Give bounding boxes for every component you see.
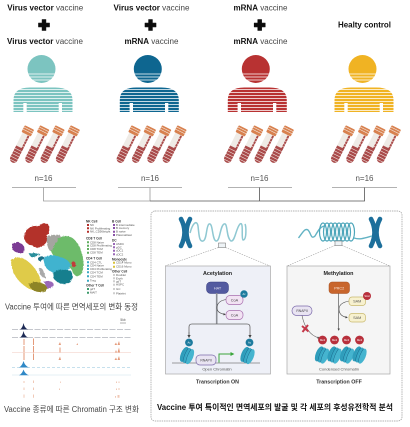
legend: cell types: CD8 Naive <box>90 240 104 244</box>
icon: person group 3 <box>226 55 288 112</box>
legend: cell types: CD4 Naive <box>90 264 104 268</box>
inner panel: methylation: SAM <box>353 316 361 320</box>
inner panel: acetylation: CoA <box>231 314 239 318</box>
legend: cell types: B memory <box>116 226 130 230</box>
legend: cell types: Platelet <box>116 291 126 295</box>
legend: cell types: cDC1 <box>116 249 124 253</box>
legend: cell types: cDC2 <box>116 252 124 256</box>
inner panel: acetylation: Open Chromatin <box>202 366 232 372</box>
heading: group 3 vaccines: mRNA vaccine <box>234 37 288 46</box>
legend: cell types: CD4 Proliferating <box>90 267 112 271</box>
icon: person group 4 <box>333 55 395 112</box>
heading: group 1 vaccines: Virus vector vaccine <box>7 4 84 12</box>
inner panel: methylation: PRC2 <box>334 286 344 290</box>
icon: person group 2 <box>118 55 180 112</box>
panel: epigenetic analysis <box>151 211 402 421</box>
legend: cell types: CD4 TEM <box>90 274 103 278</box>
legend: cell types: Eryth <box>116 276 123 280</box>
legend: cell types: B intermediate <box>116 223 135 227</box>
heading: group 3 vaccines <box>234 4 288 46</box>
legend: cell types: Treg <box>90 279 96 283</box>
chart: chromatin tracks: 5kb <box>120 318 126 322</box>
inner panel: acetylation: Ac <box>248 340 252 344</box>
chart: chromatin tracks <box>12 318 131 398</box>
legend: cell types: gdT <box>90 287 95 291</box>
legend: cell types: Doublet <box>116 273 126 277</box>
icon: blood tubes group 1 <box>7 125 81 165</box>
heading: healthy control: Healty control <box>338 20 391 30</box>
legend: cell types: B Cell <box>112 219 121 223</box>
legend: cell types: CD4 CTL <box>90 260 102 264</box>
legend: cell types: CD8 T Cell <box>86 237 102 241</box>
inner panel: acetylation <box>165 248 270 374</box>
legend: cell types: CD8 TEM <box>90 251 103 255</box>
inner panel: acetylation: RNAPII <box>200 358 212 362</box>
label: transcription on: Transcription ON <box>196 380 239 386</box>
sample size labels: n=16 <box>141 174 160 183</box>
inner panel: methylation: RNAPII <box>296 309 308 313</box>
legend: cell types: CD4 TCM <box>90 270 103 274</box>
legend: cell types: ASDC <box>116 242 124 246</box>
caption: chromatin structure change: Vaccine 종류에 따른 Chromatin 구조 변화 <box>4 404 140 414</box>
heading: group 2 vaccines: mRNA vaccine <box>124 37 179 46</box>
inner panel: methylation: SAM <box>353 300 361 304</box>
legend: cell types: CD16 Mono <box>116 265 132 269</box>
legend: cell types: CD14 Mono <box>116 261 132 265</box>
legend: cell types: gdT <box>116 279 121 283</box>
legend: cell types: B naive <box>116 230 126 234</box>
legend: cell types: CD4 T Cell <box>86 256 102 260</box>
inner panel: methylation <box>287 246 390 374</box>
legend: cell types: Monocyte <box>112 257 127 261</box>
inner panel: acetylation: Ac <box>242 292 246 296</box>
legend: cell types: CD8 TCM <box>90 247 103 251</box>
inner panel: acetylation: HAT <box>214 286 222 290</box>
inner panel: acetylation: CoA <box>231 298 239 302</box>
inner panel: methylation: Me3 <box>332 338 338 342</box>
legend: cell types: pDC <box>116 245 122 249</box>
sample size labels <box>34 174 374 183</box>
icon: person group 1 <box>12 55 74 112</box>
heading: group 1 vaccines <box>7 4 84 46</box>
legend: cell types: NK <box>90 223 94 227</box>
inner panel: methylation: SAH <box>364 294 370 298</box>
legend: cell types: MAIT <box>90 291 97 295</box>
legend: cell types: NK Proliferating <box>90 226 111 230</box>
legend: cell types: ILC <box>116 287 120 291</box>
legend: cell types: NK Cell <box>86 219 97 223</box>
sample size labels: n=16 <box>355 174 374 183</box>
inner panel: methylation: Me3 <box>357 338 363 342</box>
caption: immune cell dynamics: Vaccine 투여에 따른 면역세포의 변화 동정 <box>5 302 138 312</box>
icon: blood tubes group 4 <box>328 125 402 165</box>
legend: cell types: Plasmablast <box>116 233 132 237</box>
sample size labels: n=16 <box>250 174 269 183</box>
bracket connector <box>12 188 397 201</box>
heading: group 2 vaccines: Virus vector vaccine <box>114 4 190 12</box>
panel title: Vaccine 투여 특이적인 면역세포의 발굴 및 각 세포의 후성유전학적 분석 <box>157 402 393 412</box>
legend: cell types: CD8 Proliferating <box>90 244 112 248</box>
icon: condensed chromosome with coil <box>298 219 380 246</box>
legend: cell types: DC <box>112 238 117 242</box>
inner panel: methylation: Methylation <box>324 271 353 277</box>
label: transcription off: Transcription OFF <box>316 380 363 386</box>
legend: cell types: Other T Cell <box>86 284 104 288</box>
inner panel: acetylation: Acetylation <box>203 271 232 277</box>
sample size labels: n=16 <box>34 174 53 183</box>
legend: cell types: NK_CD56bright <box>90 230 110 234</box>
legend: cell types: Other Cell <box>112 270 127 274</box>
icon: blood tubes group 3 <box>221 125 295 165</box>
inner panel: methylation: Me3 <box>320 338 326 342</box>
heading: group 3 vaccines: mRNA vaccine <box>234 4 288 12</box>
icon: blood tubes group 2 <box>113 125 187 165</box>
heading: group 2 vaccines <box>114 4 190 46</box>
legend: cell types <box>86 219 135 295</box>
legend: cell types: HSPC <box>116 283 124 287</box>
inner panel: methylation: Condensed Chromatin <box>319 366 359 372</box>
chart: UMAP of immune cells <box>11 223 84 292</box>
inner panel: acetylation: Ac <box>187 340 191 344</box>
icon: open chromosome with thread <box>181 219 246 248</box>
inner panel: methylation: Me3 <box>344 338 350 342</box>
heading: group 1 vaccines: Virus vector vaccine <box>7 37 84 46</box>
